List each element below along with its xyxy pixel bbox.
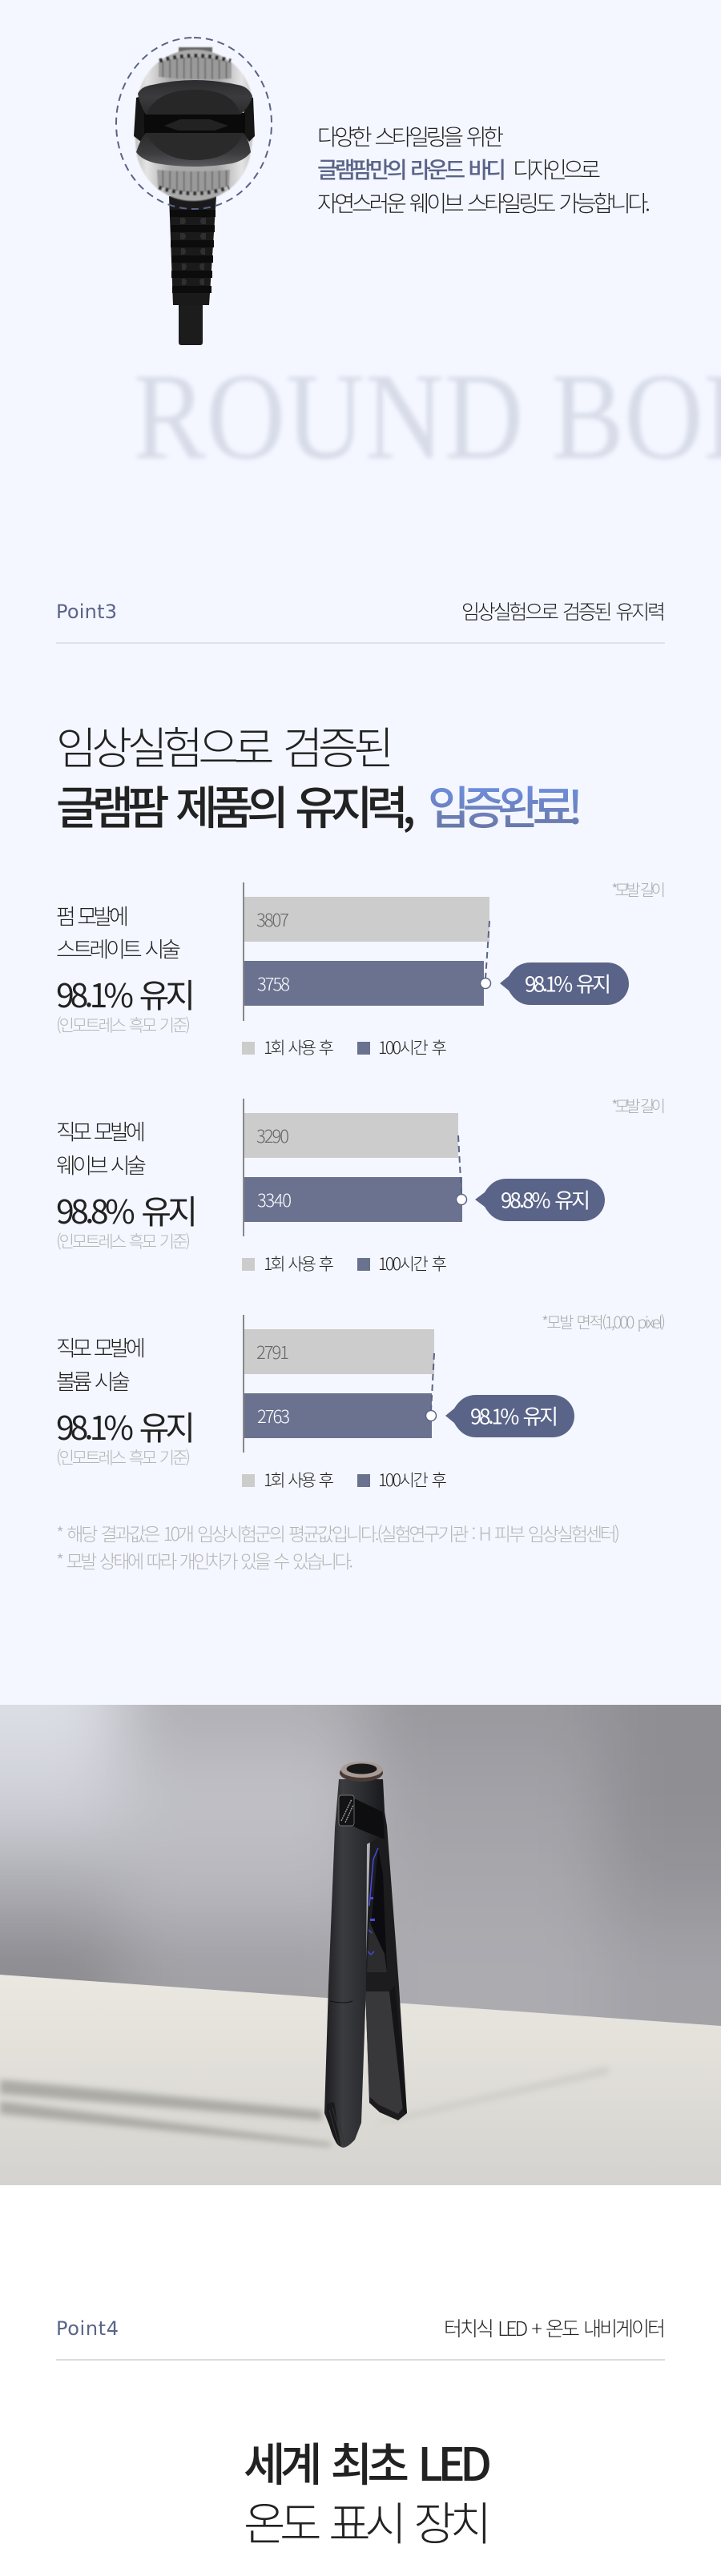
panel: chart 2 virgin hair to wave <box>56 1094 666 1276</box>
heading: point3 title <box>56 713 583 838</box>
panel: pale blue background <box>0 0 721 1705</box>
icon: silver head shell <box>135 47 253 201</box>
heading: point3 title: 임상실험으로 검증된 <box>56 713 394 777</box>
text block: chart 2 summary: 웨이브 시술 <box>56 1148 147 1180</box>
text block: round body description: 글램팜만의 라운드 바디 <box>317 153 506 185</box>
section header: Point3 <box>56 597 666 644</box>
legend: chart 1: 100시간 후 <box>378 1035 447 1059</box>
iron top ring <box>340 1762 383 1782</box>
iron touch panel <box>365 1848 387 1991</box>
bar chart: chart 2: 3290 <box>256 1123 289 1148</box>
section header: Point4 <box>56 2313 666 2361</box>
heading: point3 title: 글램팜 제품의 유지력, <box>56 772 416 838</box>
bar chart: chart 1 <box>242 878 666 1059</box>
heading: point4 title <box>244 2429 492 2554</box>
bar chart: chart 3: *모발 면적(1,000 pixel) <box>542 1310 666 1332</box>
legend: chart 3: 1회 사용 후 <box>264 1468 334 1492</box>
text block: round body description: 자연스러운 웨이브 스타일링도 가능합니다. <box>317 187 651 219</box>
iron back arm <box>365 1794 407 2120</box>
panel: chart 1 perm to straight <box>56 878 666 1059</box>
bar chart: chart 2 <box>242 1094 666 1276</box>
text block: chart 1 summary: (인모트레스 흑모 기준) <box>56 1013 191 1037</box>
panel: chart 3 virgin hair to volume <box>56 1310 666 1492</box>
bar chart: chart 1: 3807 <box>256 906 289 932</box>
text block: chart 2 summary: 직모 모발에 <box>56 1115 146 1147</box>
text block: round body description: 다양한 스타일링을 위한 <box>317 120 504 152</box>
legend: chart 3 <box>242 1468 447 1492</box>
callout: chart 1: 98.1% 유지 <box>525 969 611 998</box>
heading: point4 title: 온도 표시 장치 <box>244 2488 492 2554</box>
callout: chart 1 <box>500 962 629 1005</box>
footnotes: * 해당 결과값은 10개 임상시험군의 평균값입니다.(실험연구기관 : H 피부 임상실험센터) <box>56 1519 620 1546</box>
bar chart: chart 3: 2791 <box>256 1339 289 1364</box>
callout: chart 2 <box>475 1179 605 1221</box>
wall backdrop <box>0 1705 721 2026</box>
callout: chart 2: 98.8% 유지 <box>501 1185 590 1214</box>
text block: chart 3 summary: 98.1% 유지 <box>56 1401 195 1449</box>
heading: point4 title: 세계 최초 LED <box>244 2429 492 2494</box>
cast shadows <box>0 2066 609 2147</box>
text block: chart 2 summary: 98.8% 유지 <box>56 1185 198 1233</box>
text block: chart 3 summary: 볼륨 시술 <box>56 1364 131 1397</box>
bar chart: chart 1: *모발 길이 <box>611 878 666 900</box>
section header: Point3: 임상실험으로 검증된 유지력 <box>461 597 666 625</box>
text block: chart 1 summary <box>56 900 195 1037</box>
product illustration: round body iron head <box>116 38 272 345</box>
section header: Point4: 터치식 LED + 온도 내비게이터 <box>444 2313 666 2342</box>
panel: white lower section <box>0 2185 721 2576</box>
iron front arm <box>324 1779 385 2148</box>
legend: chart 3: 100시간 후 <box>378 1468 447 1492</box>
text block: chart 2 summary: (인모트레스 흑모 기준) <box>56 1229 191 1253</box>
bar chart: chart 1: 3758 <box>257 971 290 996</box>
bar chart: chart 3: 2763 <box>257 1403 290 1429</box>
icon: ribbed handle <box>169 196 216 305</box>
text block: chart 1 summary: 스트레이트 시술 <box>56 932 181 964</box>
legend: chart 2: 100시간 후 <box>378 1252 447 1276</box>
legend: chart 2: 1회 사용 후 <box>264 1252 334 1276</box>
photo: black hair iron on table <box>0 1705 721 2185</box>
text block: chart 1 summary: 98.1% 유지 <box>56 969 195 1017</box>
heading: point3 title: 입증완료! <box>428 772 583 838</box>
footnotes <box>56 1519 620 1573</box>
text block: chart 3 summary: (인모트레스 흑모 기준) <box>56 1445 191 1469</box>
bar chart: chart 3 <box>242 1310 666 1492</box>
legend: chart 1 <box>242 1035 447 1059</box>
callout: chart 3 <box>445 1395 574 1437</box>
icon: head dark caps <box>134 80 255 167</box>
callout: chart 3: 98.1% 유지 <box>470 1401 558 1430</box>
icon: cord <box>179 303 203 345</box>
bar chart: chart 2: 3340 <box>257 1187 292 1212</box>
legend: chart 2 <box>242 1252 447 1276</box>
section header: Point3: Point3 <box>56 601 117 623</box>
text block: chart 3 summary: 직모 모발에 <box>56 1331 146 1363</box>
text block: chart 2 summary <box>56 1115 198 1253</box>
text block: chart 1 summary: 펌 모발에 <box>56 900 129 930</box>
section header: Point4: Point4 <box>56 2317 119 2340</box>
text block: round body description: 디자인으로 <box>513 153 601 185</box>
table surface <box>0 1975 721 2185</box>
bar chart: chart 2: *모발 길이 <box>611 1094 666 1116</box>
text block: chart 3 summary <box>56 1331 195 1469</box>
text block: round body description <box>317 120 651 219</box>
legend: chart 1: 1회 사용 후 <box>264 1035 334 1059</box>
footnotes: * 모발 상태에 따라 개인차가 있을 수 있습니다. <box>56 1546 353 1573</box>
icon: dashed outline <box>116 38 272 209</box>
